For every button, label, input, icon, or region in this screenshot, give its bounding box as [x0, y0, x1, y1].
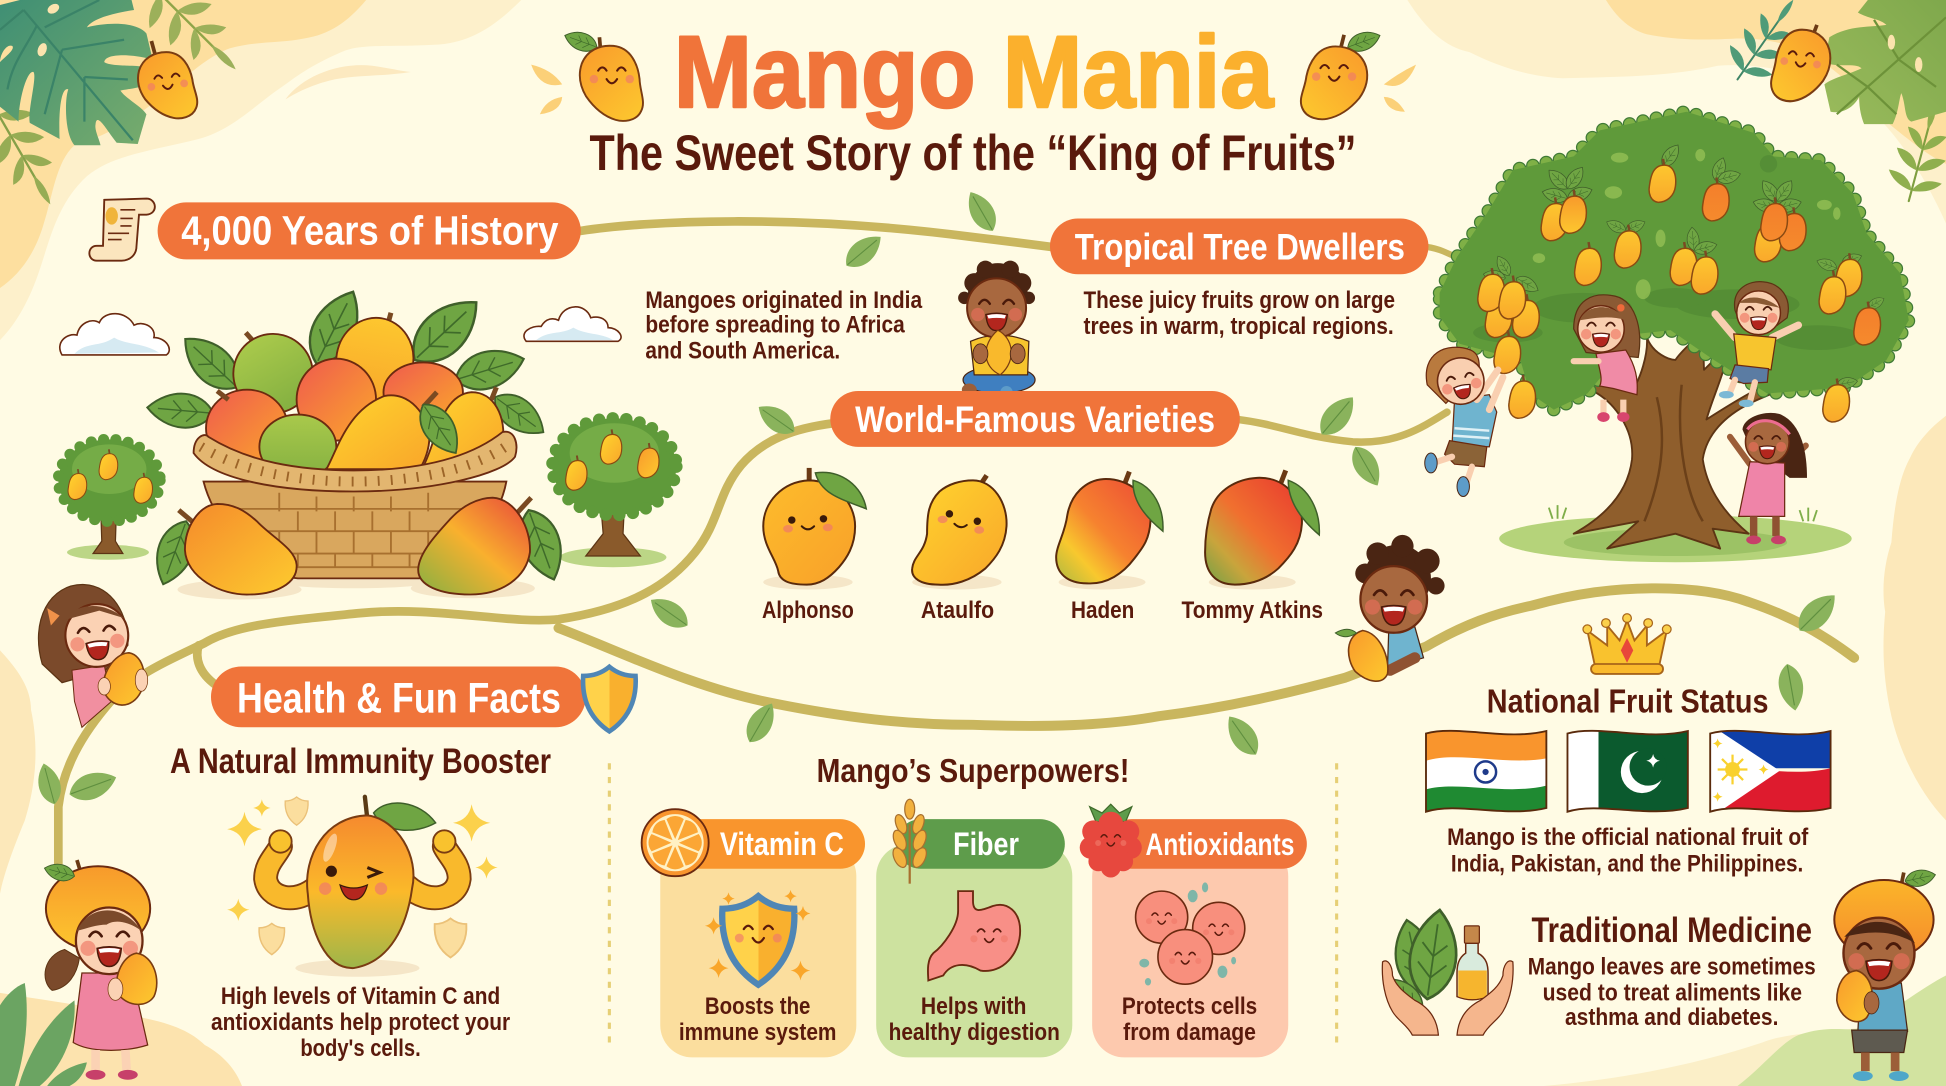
text block: immunity description: High levels of Vitamin C and: [221, 983, 500, 1010]
heading: National Fruit Status: National Fruit Status: [1487, 683, 1769, 720]
flag: Philippines: [1710, 725, 1831, 818]
variety: Haden: Haden: [1071, 597, 1134, 624]
icon: mango hanging top-right: [1771, 25, 1830, 101]
text block: immunity description: antioxidants help protect your: [211, 1009, 511, 1036]
vines connecting the topics: [33, 186, 1854, 864]
heading pill: World-Famous Varieties: [830, 391, 1240, 447]
icon: happy stomach: [928, 891, 1020, 980]
variety: Alphonso: [762, 468, 866, 624]
text block: traditional medicine: used to treat aliments like: [1543, 979, 1802, 1006]
variety: Tommy Atkins: Tommy Atkins: [1182, 597, 1323, 624]
text block: national fruit: Mango is the official national fruit of: [1447, 824, 1809, 851]
icon: smiling berry: [1080, 804, 1142, 877]
child: girl wearing mango hat: [42, 860, 157, 1080]
card: Vitamin C: [642, 809, 865, 1057]
illustration: large mango tree with children: [1425, 112, 1909, 562]
text block: immunity description: body's cells.: [300, 1035, 421, 1062]
illustration: left cloud: [60, 314, 169, 355]
text block: traditional medicine: [1528, 953, 1816, 1031]
heading pill: Tropical Tree Dwellers: Tropical Tree Dwellers: [1075, 225, 1405, 267]
heading: Mango's Superpowers!: Mango’s Superpowers!: [817, 753, 1129, 790]
variety: Ataulfo: [912, 475, 1007, 624]
heading pill: World-Famous Varieties: World-Famous Varieties: [855, 398, 1215, 440]
text block: traditional medicine: Mango leaves are sometimes: [1528, 953, 1816, 980]
text block: tree habitat: These juicy fruits grow on large: [1083, 287, 1395, 314]
variety: Haden: [1056, 472, 1163, 624]
heading pill: Health & Fun Facts: Health & Fun Facts: [237, 674, 561, 721]
icon: happy cells: [1136, 882, 1245, 985]
child: boy with mango on the vine right: [1335, 535, 1445, 681]
child: boy sitting on branch waving: [1715, 282, 1798, 407]
foliage: top-right leaves: [1716, 0, 1946, 208]
child: boy wearing mango hat: [1834, 867, 1937, 1081]
text block: mango origins: [645, 287, 923, 365]
child: boy eating a mango: [958, 261, 1035, 398]
heading: Traditional Medicine: Traditional Medicine: [1531, 912, 1812, 950]
illustration: small mango tree right: [552, 418, 676, 567]
icon: happy shield: [705, 890, 810, 985]
icon: crown: [1583, 614, 1671, 674]
title icon: right smiling mango: [1301, 27, 1416, 119]
text block: tree habitat: [1083, 287, 1395, 340]
subtitle: The Sweet Story of the “King of Fruits”: [590, 125, 1356, 181]
title word: Mania: Mania: [1003, 15, 1275, 129]
card: Antioxidants: from damage: [1123, 1019, 1256, 1046]
foliage: top-left leaves: [0, 0, 258, 220]
icon: wheat stalk: [890, 799, 929, 884]
text block: tree habitat: trees in warm, tropical regions.: [1083, 313, 1394, 340]
card: Antioxidants: Protects cells: [1122, 993, 1257, 1020]
card: Antioxidants: Antioxidants: [1146, 827, 1294, 862]
card: Fiber: healthy digestion: [889, 1019, 1060, 1046]
icon: history scroll: [89, 199, 155, 261]
divider left: [608, 763, 611, 1049]
text block: national fruit: [1447, 824, 1809, 877]
card: Fiber: [876, 799, 1072, 1057]
title word: Mango: Mango: [674, 15, 975, 129]
foliage: bottom-left leaves: [0, 983, 87, 1086]
card: Vitamin C: immune system: [679, 1019, 836, 1046]
icon: shield next to health heading: [583, 667, 636, 731]
text block: mango origins: before spreading to Africa: [645, 312, 905, 339]
title icon: left smiling mango: [531, 27, 647, 123]
card: Vitamin C: Vitamin C: [720, 826, 844, 862]
variety: Ataulfo: Ataulfo: [921, 597, 994, 624]
child: girl with mango on the vine left: [38, 585, 148, 727]
divider right: [1335, 763, 1338, 1049]
text block: mango origins: and South America.: [645, 338, 840, 365]
text block: immunity description: [211, 983, 511, 1062]
text block: traditional medicine: asthma and diabetes.: [1565, 1004, 1778, 1031]
variety: Tommy Atkins: [1182, 470, 1323, 624]
heading: A Natural Immunity Booster: A Natural Immunity Booster: [170, 743, 551, 781]
variety: Alphonso: Alphonso: [762, 597, 854, 624]
card: Fiber: Fiber: [953, 826, 1019, 862]
illustration: right cloud: [524, 307, 621, 341]
icon: mango hanging top-left: [138, 41, 197, 118]
text block: mango origins: Mangoes originated in India: [645, 287, 923, 314]
heading pill: 4,000 Years of History: 4,000 Years of History: [181, 208, 559, 254]
child: boy hanging from branch: [1425, 347, 1503, 496]
child: girl standing under tree: [1730, 413, 1807, 544]
card: Vitamin C: Boosts the: [705, 993, 810, 1020]
illustration: small mango tree left: [58, 439, 160, 560]
icon: hands holding leaves and oil bottle: [1376, 907, 1513, 1035]
illustration: flexing mango mascot: [227, 797, 498, 977]
flag: India: [1426, 724, 1546, 818]
text block: national fruit: India, Pakistan, and the Philippines.: [1451, 850, 1803, 877]
illustration: basket of mangoes: [146, 282, 572, 599]
heading pill: Health & Fun Facts: [211, 666, 586, 727]
flag: Pakistan: [1567, 729, 1688, 818]
child: girl sitting on branch: [1574, 295, 1640, 422]
icon: orange slice: [642, 809, 709, 876]
heading pill: Tropical Tree Dwellers: [1050, 218, 1428, 274]
card: Antioxidants: [1080, 804, 1307, 1057]
card: Fiber: Helps with: [921, 993, 1026, 1020]
